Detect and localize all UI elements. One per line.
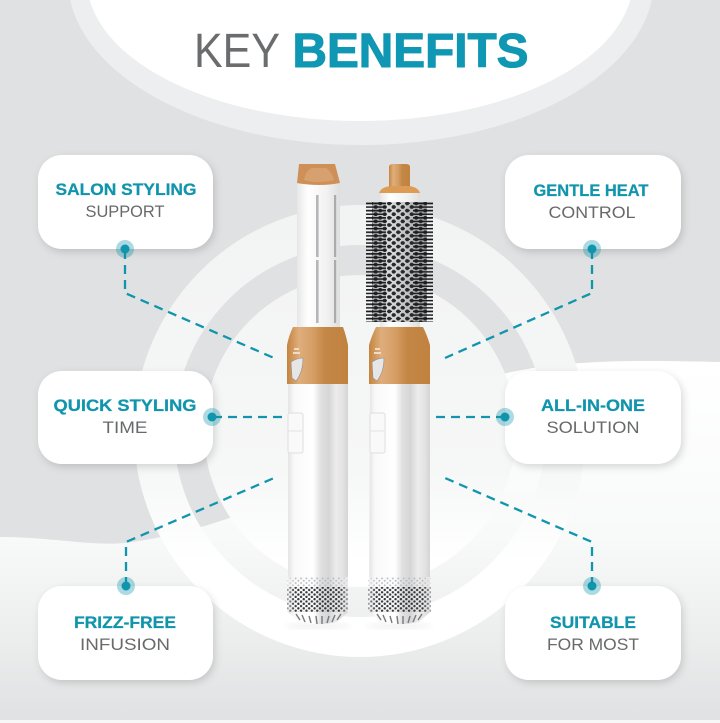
- card: gentle heat control: GENTLE HEAT: [534, 181, 649, 200]
- card: quick styling time: QUICK STYLING: [54, 396, 196, 415]
- card: frizz-free infusion: INFUSION: [80, 635, 170, 654]
- connector: suitable: [445, 478, 592, 586]
- top arc band: [68, 0, 654, 145]
- vent grill: [287, 577, 348, 587]
- dot: gentle heat: [583, 240, 601, 258]
- handle: [369, 384, 430, 624]
- bottom edge strip: [0, 720, 720, 723]
- card: gentle heat control: CONTROL: [548, 203, 636, 222]
- handle: [288, 384, 348, 624]
- barrel cap: [297, 164, 340, 185]
- switch: [370, 413, 385, 453]
- device: right styler with round brush attachment: [365, 164, 433, 629]
- card: frizz-free infusion: [38, 586, 213, 680]
- connector: all-in-one: [435, 416, 505, 418]
- dot: all-in-one: [496, 408, 514, 426]
- background wave: lower light area: [0, 361, 720, 723]
- dot: frizz-free: [117, 577, 135, 595]
- card: salon styling support: SUPPORT: [86, 202, 164, 221]
- device: left styler with barrel attachment: [284, 164, 352, 629]
- card: quick styling time: TIME: [102, 418, 148, 437]
- card: all-in-one solution: SOLUTION: [546, 418, 640, 437]
- card: suitable for most: SUITABLE: [550, 613, 636, 632]
- vent grill: [368, 577, 431, 587]
- brush bristles: [366, 202, 433, 322]
- dot: salon styling: [116, 240, 134, 258]
- dot: suitable: [583, 577, 601, 595]
- barrel: [297, 184, 340, 330]
- connector: frizz-free: [126, 478, 274, 586]
- card: salon styling support: [38, 155, 213, 249]
- top white ellipse: [87, 0, 633, 121]
- cap: [379, 186, 420, 193]
- connector: quick styling: [213, 416, 285, 418]
- barrel: [380, 193, 420, 330]
- connector: gentle heat: [445, 250, 592, 358]
- title: BENEFITS: [292, 25, 528, 78]
- card: all-in-one solution: [505, 371, 681, 464]
- connector: salon styling: [125, 250, 274, 358]
- card: suitable for most: FOR MOST: [547, 635, 639, 654]
- card: gentle heat control: [505, 155, 681, 249]
- card: all-in-one solution: ALL-IN-ONE: [541, 396, 645, 415]
- background rings: [154, 225, 566, 637]
- title: KEY: [194, 25, 280, 78]
- card: salon styling support: SALON STYLING: [56, 180, 196, 199]
- nozzle: [389, 164, 410, 188]
- card: quick styling time: [38, 371, 213, 464]
- gold collar: [287, 327, 348, 384]
- switch: [288, 413, 303, 453]
- dot: quick styling: [203, 408, 221, 426]
- gold collar: [369, 327, 430, 384]
- card: suitable for most: [505, 586, 681, 680]
- card: frizz-free infusion: FRIZZ-FREE: [74, 613, 176, 632]
